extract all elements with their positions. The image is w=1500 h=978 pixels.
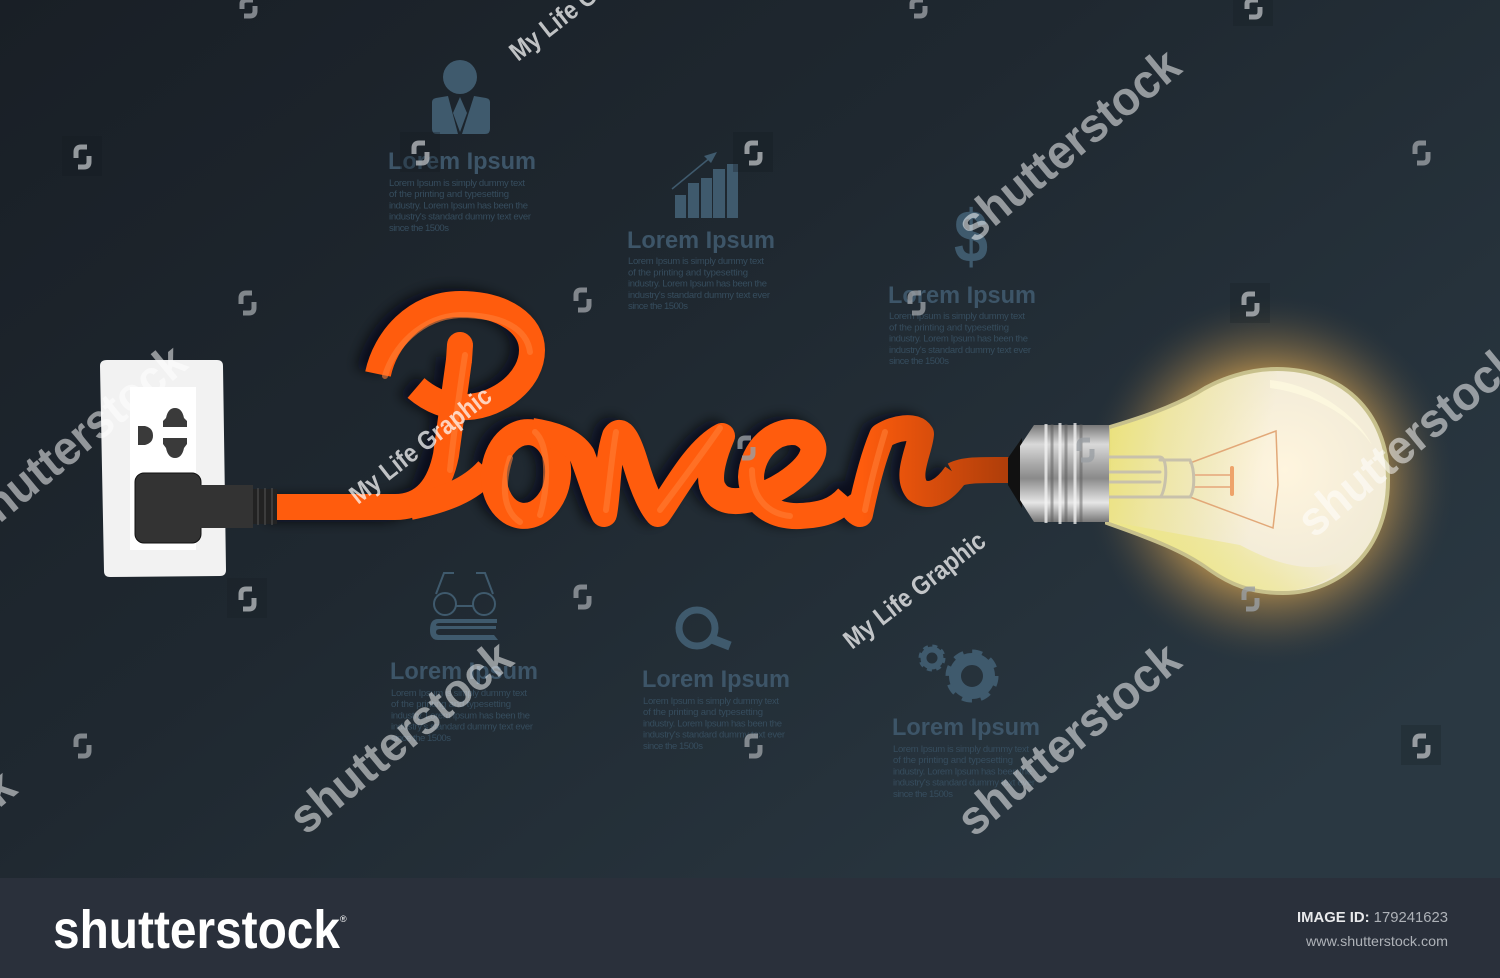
body text: [628, 256, 770, 312]
body text: industry's standard dummy text ever: [391, 722, 533, 732]
body text: since the 1500s: [391, 733, 451, 744]
icon: dollar: $: [954, 195, 988, 278]
heading: Lorem Ipsum: [627, 227, 775, 254]
body text: of the printing and typesetting: [643, 707, 763, 718]
bulb glow: [1085, 295, 1455, 665]
heading: Lorem Ipsum: [888, 282, 1036, 309]
body text: Lorem Ipsum is simply dummy text: [889, 311, 1025, 322]
body text: since the 1500s: [389, 223, 449, 234]
body text: industry. Lorem Ipsum has been the: [389, 200, 528, 212]
watermarks: My Life Graphic: My Life Graphic: [343, 380, 497, 510]
body text: industry's standard dummy text ever: [889, 345, 1031, 356]
body text: industry. Lorem Ipsum has been the: [889, 334, 1028, 344]
footer logo: shutterstock: [53, 900, 341, 960]
watermarks: shutterstock: shutterstock: [947, 632, 1191, 846]
body text: [643, 696, 785, 752]
footer site url: www.shutterstock.com: [1305, 933, 1448, 949]
filament: [1108, 431, 1278, 528]
cable highlights: [385, 315, 885, 522]
body text: [389, 178, 531, 234]
base: [1008, 423, 1109, 524]
body text: of the printing and typesetting: [889, 322, 1009, 334]
panel: glasses block: [390, 573, 538, 744]
panel: person block: [388, 60, 536, 234]
heading: Lorem Ipsum: [892, 714, 1040, 741]
body text: industry. Lorem Ipsum has been the: [643, 718, 782, 730]
body text: Lorem Ipsum is simply dummy text: [643, 696, 779, 707]
body text: since the 1500s: [643, 741, 703, 752]
icon: growth chart: [672, 152, 738, 218]
icon: gears: [920, 646, 996, 700]
body text: industry's standard dummy text ever: [389, 212, 531, 222]
watermarks: shutterstock: shutterstock: [947, 38, 1191, 252]
watermarks: shutterstock: shutterstock: [279, 630, 523, 844]
word label: Power: [369, 343, 972, 564]
body text: since the 1500s: [889, 356, 949, 367]
body text: Lorem Ipsum is simply dummy text: [893, 744, 1029, 755]
body text: since the 1500s: [893, 789, 953, 800]
body text: industry. Lorem Ipsum has been the: [893, 766, 1032, 778]
footer bar: [0, 878, 1500, 978]
body text: industry's standard dummy text ever: [893, 778, 1035, 788]
body text: [893, 744, 1035, 800]
body text: of the printing and typesetting: [893, 755, 1013, 766]
heading: Lorem Ipsum: [390, 658, 538, 685]
watermarks: My Life Graphic: My Life Graphic: [837, 525, 991, 655]
heading: Lorem Ipsum: [388, 148, 536, 175]
watermark bracket tiles: [62, 0, 1441, 765]
icon: glasses on book: [430, 573, 498, 640]
body text: Lorem Ipsum is simply dummy text: [389, 178, 525, 189]
panel: gears block: [892, 646, 1040, 800]
body text: of the printing and typesetting: [628, 268, 748, 278]
glass: [1107, 369, 1388, 593]
heading: Lorem Ipsum: [642, 666, 790, 693]
body text: [889, 311, 1031, 367]
cable: Power: [275, 304, 1010, 564]
plate: [100, 360, 226, 577]
body text: Lorem Ipsum is simply dummy text: [628, 256, 764, 267]
body text: since the 1500s: [628, 301, 688, 312]
body text: [391, 688, 533, 744]
icon: businessman: [432, 60, 490, 134]
body text: industry. Lorem Ipsum has been the: [628, 278, 767, 290]
plug: [135, 473, 277, 543]
light bulb: [1008, 369, 1388, 593]
footer logo: ®: [340, 914, 347, 924]
panel: dollar block: [888, 195, 1036, 367]
panel: search block: [642, 610, 790, 752]
icon: magnifier: [679, 610, 730, 646]
body text: of the printing and typesetting: [389, 189, 509, 200]
body text: industry's standard dummy text ever: [628, 290, 770, 301]
panel: chart block: [627, 152, 775, 312]
cable shadow: [266, 301, 947, 513]
body text: of the printing and typesetting: [391, 699, 511, 710]
outlet: [100, 360, 277, 577]
socket holes: [138, 408, 187, 458]
footer image id: IMAGE ID: 179241623: [1297, 909, 1448, 926]
body text: industry. Lorem Ipsum has been the: [391, 710, 530, 722]
body text: industry's standard dummy text ever: [643, 730, 785, 740]
watermarks: My Life Graphic: [343, 0, 991, 655]
body text: Lorem Ipsum is simply dummy text: [391, 688, 527, 699]
